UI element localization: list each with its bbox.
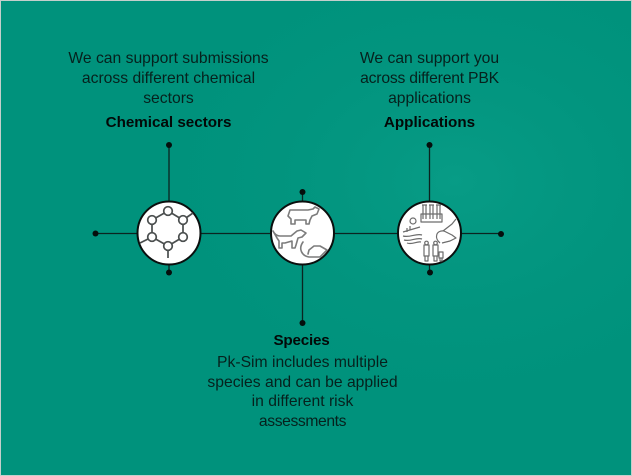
text block: species description: in different risk	[252, 393, 353, 410]
heading: applications: Applications	[384, 114, 475, 131]
text block: applications description	[360, 50, 499, 107]
text block: species description: Pk-Sim includes multiple	[217, 354, 388, 371]
connector lines	[95, 145, 501, 323]
text block: applications description: applications	[388, 90, 471, 107]
connector end dots	[92, 142, 504, 326]
text block: species description: species and can be applied	[207, 374, 398, 390]
heading: chemical sectors: Chemical sectors	[106, 114, 231, 131]
text block: applications description: We can support you	[360, 50, 499, 67]
text block: applications description: across different PBK	[360, 70, 499, 87]
text block: chemical sectors description	[68, 50, 269, 107]
text block: chemical sectors description: We can support submissions	[68, 50, 269, 67]
icon: applications	[398, 202, 461, 264]
text block: chemical sectors description: across different chemical	[82, 70, 255, 87]
text block: chemical sectors description: sectors	[143, 90, 194, 107]
icon: species animals	[271, 202, 334, 264]
text block: species description: assessments	[259, 412, 346, 430]
text block: species description	[207, 354, 398, 430]
icon: chemical ring	[138, 202, 200, 264]
heading: species: Species	[273, 332, 330, 349]
